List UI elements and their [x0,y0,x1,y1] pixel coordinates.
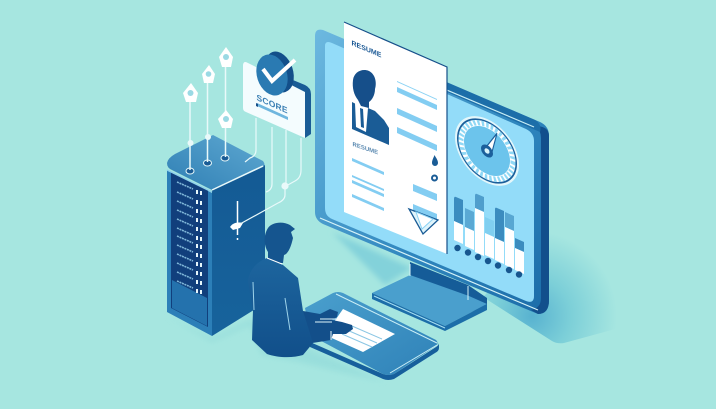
score bar [257,103,288,120]
server port rings [186,155,229,174]
profile photo silhouette [352,70,389,145]
monitor stand [372,262,487,331]
bar chart [454,194,524,278]
resume text lines [352,81,437,222]
server right side [212,165,265,336]
server drive rows [177,182,202,294]
person torso [248,258,313,357]
icon: drop [432,155,438,166]
server rack [167,135,265,336]
icon: ring [432,176,437,180]
server top [167,135,264,190]
stand base [372,275,487,326]
monitor screen [325,42,534,302]
icon: check badge [409,209,438,234]
paper on pad [325,309,395,352]
person at keyboard [248,223,353,357]
resume heading: RESUME [352,38,382,60]
bar chart dots [454,245,522,278]
pin icons [183,47,233,128]
connector lines [240,118,301,224]
pins rising from the server [183,47,233,170]
score card back [288,78,311,138]
server side connector [236,201,238,250]
keyboard pad [305,292,439,380]
person head [265,223,295,263]
resume subheading: RESUME [352,141,378,156]
score card face [243,62,305,138]
monitor frame [315,30,549,314]
check badge [251,48,299,100]
monitor [315,30,549,314]
resume document [344,22,447,254]
stand neck [410,262,487,322]
person arms and hands [292,309,353,345]
desk shadow [165,315,385,382]
score card [243,48,311,138]
gauge needle [484,128,497,158]
monitor shadow [332,230,630,343]
gauge [455,105,519,197]
score label: SCORE [256,92,288,116]
server front [167,170,212,336]
